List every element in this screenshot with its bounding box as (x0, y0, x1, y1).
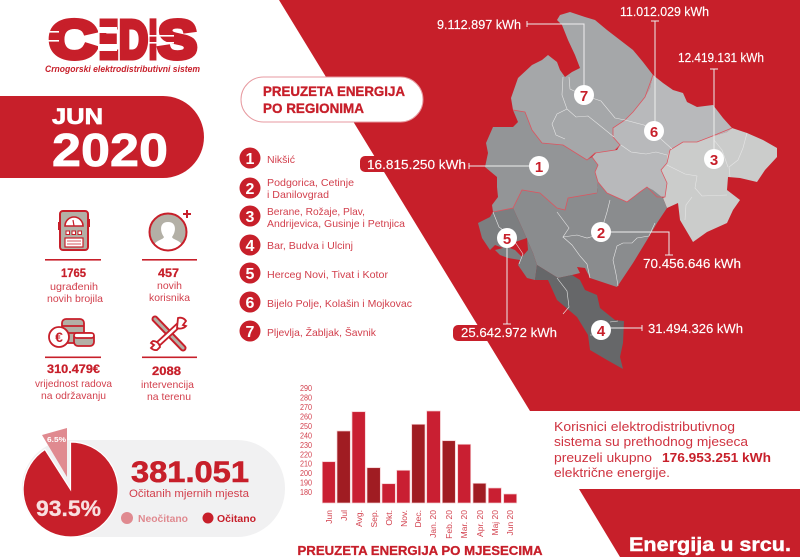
date pill: 2020 (52, 124, 168, 176)
icon: meter (58, 211, 90, 250)
region list: Podgorica, Cetinje (267, 177, 354, 189)
region 6 (592, 75, 732, 202)
map markers: 3 (710, 152, 718, 169)
y axis labels: 290 (300, 383, 312, 393)
region list: 4 (246, 238, 255, 255)
kWh labels: 31.494.326 kWh (648, 321, 743, 336)
kWh labels: 70.456.646 kWh (643, 256, 741, 271)
summary text: 176.953.251 kWh (662, 450, 771, 465)
summary text: preuzeli ukupno (554, 450, 652, 465)
stat: new meters: novih brojila (47, 293, 103, 305)
icon: euro coins: € (55, 329, 63, 345)
summary text: sistema su prethodnog mjeseca (554, 434, 749, 449)
stat: maintenance value: na održavanju (41, 390, 106, 402)
y axis labels: 250 (300, 421, 312, 431)
kWh labels: 9.112.897 kWh (437, 17, 521, 32)
y axis labels: 280 (300, 392, 312, 402)
y axis labels: 240 (300, 430, 312, 440)
logo: CEDIS (45, 10, 200, 74)
stat: new users: korisnika (149, 292, 190, 304)
municipality borders (493, 77, 747, 335)
map markers: 1 (535, 159, 543, 176)
y axis labels: 210 (300, 458, 312, 468)
stat: new meters: 1765 (61, 268, 87, 280)
legend: Neočitano (138, 513, 188, 525)
region list: 2 (246, 181, 255, 198)
stat: new meters (45, 211, 103, 305)
month labels: Mar. 20 (459, 510, 469, 538)
month labels: Maj 20 (490, 510, 500, 536)
panel: read meter points (22, 428, 285, 537)
region list: 3 (246, 209, 255, 226)
heading pill: energy by region: PO REGIONIMA (263, 100, 364, 116)
region boundaries (493, 75, 732, 212)
map markers: 7 (580, 88, 588, 105)
month labels: Avg. (354, 510, 364, 527)
region list: Bar, Budva i Ulcinj (267, 240, 353, 252)
kWh labels: 16.815.250 kWh (367, 157, 466, 172)
bar chart: energy by month (298, 383, 543, 557)
map markers: 5 (503, 231, 511, 248)
y axis labels: 220 (300, 450, 312, 460)
region 7 (511, 12, 653, 160)
region list: Andrijevica, Gusinje i Petnjica (267, 218, 405, 230)
stat: maintenance value (35, 319, 112, 402)
y axis labels: 200 (300, 468, 312, 478)
stat: maintenance value: 310.479€ (47, 364, 101, 376)
stat: field interventions: na terenu (147, 391, 191, 403)
kWh labels: 25.642.972 kWh (461, 325, 557, 340)
pie chart: 6.5% (47, 437, 67, 444)
stat: maintenance value: vrijednost radova (35, 378, 112, 390)
bay of Kotor (507, 238, 528, 257)
icon: crossed tools (151, 318, 186, 350)
red background panel: map (279, 0, 800, 411)
region list: Bijelo Polje, Kolašin i Mojkovac (267, 298, 412, 310)
logo: CEDIS: S (158, 10, 197, 70)
summary text: električne energije. (554, 465, 670, 480)
month labels: Jul (339, 510, 349, 521)
month labels (324, 510, 515, 539)
panel: read meter points: 381.051 (131, 456, 249, 489)
y axis labels: 190 (300, 478, 312, 488)
summary text: Korisnici elektrodistributivnog (554, 419, 735, 434)
logo: CEDIS: D (119, 10, 148, 70)
legend: Očitano (217, 513, 256, 525)
y axis labels: 260 (300, 412, 312, 422)
stat: new users (142, 210, 197, 304)
slogan: Energija u srcu. (629, 535, 791, 556)
map markers (497, 85, 724, 340)
month labels: Feb. 20 (444, 510, 454, 539)
region 2 (513, 182, 667, 287)
summary text (554, 419, 771, 480)
logo: CEDIS: Crnogorski elektrodistributivni sistem (45, 64, 200, 74)
region list: Nikšić (267, 154, 295, 166)
y axis labels (300, 383, 312, 497)
region list: i Danilovgrad (267, 189, 329, 201)
stat: field interventions (141, 318, 197, 403)
region list (240, 148, 412, 342)
region 5 (478, 208, 537, 280)
region list: 7 (246, 324, 255, 341)
heading pill: energy by region: PREUZETA ENERGIJA (263, 83, 405, 99)
region 1 (485, 110, 598, 212)
map markers: 4 (597, 323, 606, 340)
red footer panel (579, 489, 800, 557)
map of regions (469, 12, 777, 369)
month labels: Nov. (399, 510, 409, 527)
stat: new users: novih (157, 280, 182, 292)
bars (322, 411, 517, 503)
date pill: JUN (52, 104, 103, 129)
region list: Herceg Novi, Tivat i Kotor (267, 269, 389, 281)
map markers: 2 (597, 225, 605, 242)
kWh labels: 11.012.029 kWh (620, 4, 709, 19)
month labels: Jun 20 (505, 510, 515, 536)
region list: Pljevlja, Žabljak, Šavnik (267, 326, 377, 339)
map markers: 6 (650, 124, 658, 141)
stat: new meters: ugrađenih (50, 281, 98, 293)
pie chart: 93.5% (36, 496, 101, 521)
logo: CEDIS: I (149, 10, 157, 70)
region list: Berane, Rožaje, Plav, (267, 206, 365, 218)
leader lines (469, 21, 718, 331)
month labels: Jun (324, 510, 334, 524)
stat: field interventions: intervencija (141, 379, 194, 391)
kWh labels (360, 4, 764, 341)
region 3 (661, 128, 777, 242)
logo: CEDIS: C (49, 10, 97, 70)
region list: 6 (246, 295, 255, 312)
panel: read meter points: Očitanih mjernih mjesta (129, 488, 250, 500)
kWh labels: 12.419.131 kWh (678, 50, 764, 65)
logo: CEDIS: E (99, 10, 118, 70)
y axis labels: 230 (300, 440, 312, 450)
region list: 5 (246, 266, 255, 283)
icon: user with plus (150, 210, 191, 252)
month labels: Dec. (413, 510, 423, 527)
stat: new users: 457 (158, 268, 179, 280)
heading pill: energy by region (241, 77, 423, 122)
pie chart (23, 428, 118, 537)
month labels: Apr. 20 (475, 510, 485, 537)
stat: field interventions: 2088 (152, 366, 182, 378)
region list: 1 (246, 151, 255, 168)
month labels: Okt. (384, 510, 394, 526)
y axis labels: 270 (300, 402, 312, 412)
region 4 (535, 265, 624, 369)
date pill (0, 96, 204, 178)
legend (121, 512, 256, 525)
month labels: Sep. (369, 510, 379, 528)
month labels: Jan. 20 (428, 510, 438, 538)
y axis labels: 180 (300, 487, 312, 497)
